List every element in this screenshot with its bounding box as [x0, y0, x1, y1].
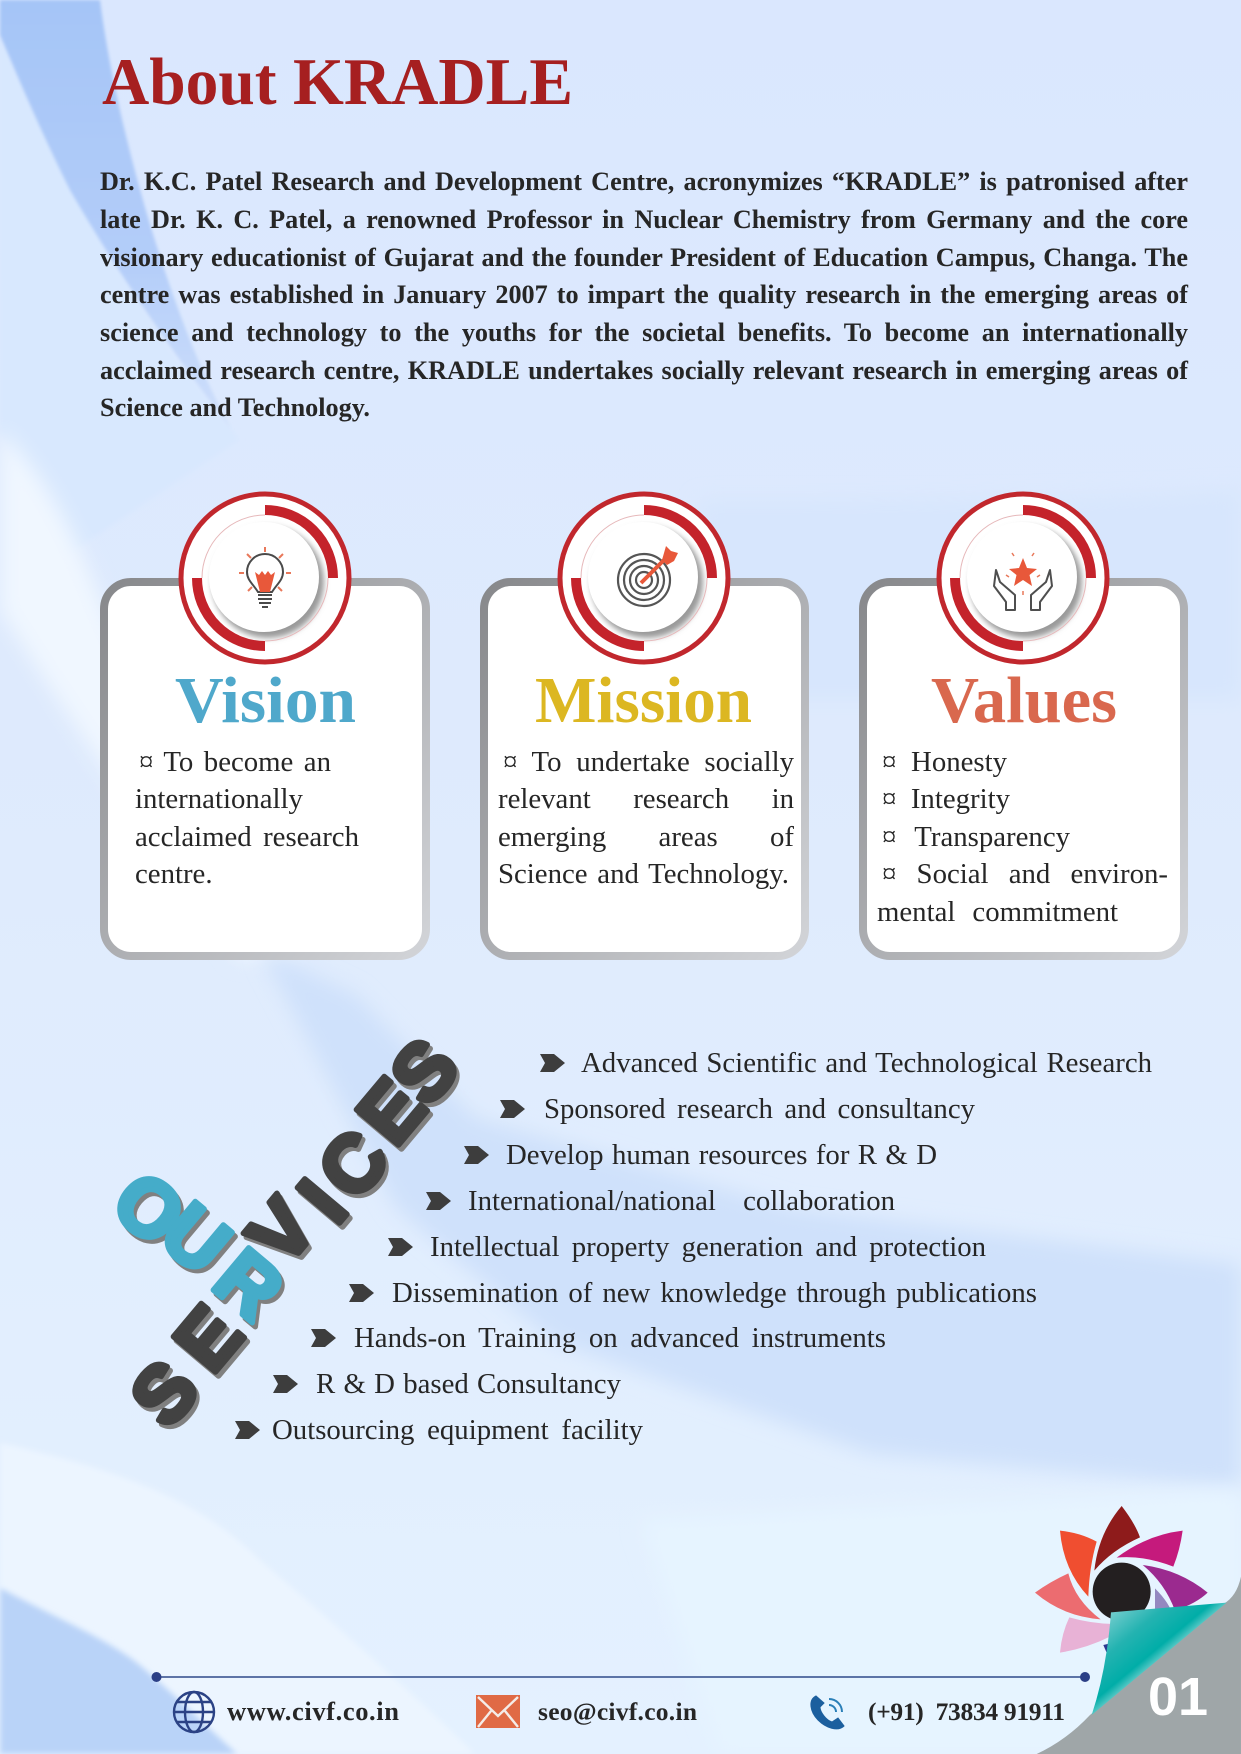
- panel: mission: [484, 582, 805, 956]
- heading word: our: [97, 1154, 300, 1337]
- text: Sponsored research and consultancy: [544, 1093, 975, 1125]
- heading word: services: C: [300, 1113, 406, 1215]
- icon: vision badge: [181, 494, 349, 662]
- text: ¤ To undertake socially: [503, 746, 794, 778]
- text: Outsourcing equipment facility: [272, 1414, 643, 1446]
- text: ¤ Transparency: [882, 821, 1070, 853]
- values text: [877, 746, 1168, 928]
- footer rule: [152, 1672, 1090, 1682]
- mission text: [498, 746, 794, 890]
- icon: values badge: [939, 494, 1107, 662]
- heading: mission: Mission: [535, 664, 752, 737]
- footer phone: (+91) 73834 91911: [868, 1697, 1065, 1726]
- heading word: services: E: [157, 1289, 259, 1387]
- text: centre.: [135, 858, 213, 890]
- icon: mission badge: [560, 494, 728, 662]
- text: acclaimed research: [135, 821, 359, 853]
- text: Dr. K.C. Patel Research and Development Centre, acronymizes “KRADLE” is patronised after: [100, 167, 1188, 196]
- heading: vision: Vision: [175, 664, 356, 737]
- text: ¤ Integrity: [882, 783, 1010, 815]
- heading: values: Values: [931, 664, 1117, 737]
- footer email: seo@civf.co.in: [538, 1697, 697, 1726]
- text: ¤ Social and environ-: [882, 858, 1168, 890]
- heading word: services: E: [340, 1062, 442, 1160]
- vision text: [135, 746, 359, 890]
- text: Dissemination of new knowledge through publications: [392, 1277, 1037, 1309]
- text: Hands-on Training on advanced instruments: [354, 1322, 886, 1354]
- heading word: services: S: [113, 1344, 215, 1442]
- text: Intellectual property generation and protection: [430, 1231, 986, 1263]
- intro paragraph: [100, 167, 1188, 422]
- text: relevant research in: [498, 783, 794, 815]
- text: ¤ To become an: [139, 746, 331, 778]
- panel: vision: [104, 582, 426, 956]
- icon: phone: [811, 1696, 844, 1729]
- text: Develop human resources for R & D: [506, 1139, 937, 1171]
- text: Science and Technology.: [498, 858, 789, 890]
- text: ¤ Honesty: [882, 746, 1007, 778]
- icon: globe: [174, 1692, 214, 1732]
- services list: [272, 1047, 1152, 1446]
- panel: values: [863, 582, 1184, 956]
- text: R & D based Consultancy: [316, 1368, 621, 1400]
- text: acclaimed research centre, KRADLE undertakes socially relevant research in emerging areas of: [100, 356, 1188, 385]
- text: mental commitment: [877, 896, 1118, 928]
- text: International/national collaboration: [468, 1185, 895, 1217]
- heading word: services: V: [230, 1182, 332, 1280]
- text: Advanced Scientific and Technological Research: [581, 1047, 1152, 1079]
- page number: 01: [1148, 1667, 1208, 1727]
- icon: service arrows: [235, 1054, 565, 1439]
- text: late Dr. K. C. Patel, a renowned Professor in Nuclear Chemistry from Germany and the core: [100, 205, 1188, 234]
- text: science and technology to the youths for the societal benefits. To become an internationally: [100, 318, 1188, 347]
- heading word: services: I: [281, 1164, 363, 1238]
- title: About KRADLE: [102, 45, 573, 119]
- text: centre was established in January 2007 to impart the quality research in the emerging areas of: [100, 280, 1188, 309]
- footer website: www.civf.co.in: [227, 1696, 399, 1726]
- text: visionary educationist of Gujarat and the founder President of Education Campus, Changa. The: [100, 243, 1188, 272]
- heading word: services: [113, 1022, 475, 1442]
- heading word: our: R: [198, 1231, 300, 1337]
- heading: our services: [97, 1022, 475, 1442]
- heading word: our: U: [145, 1185, 247, 1291]
- heading word: our: O: [97, 1154, 201, 1262]
- text: Science and Technology.: [100, 393, 370, 422]
- heading word: services: S: [373, 1022, 475, 1120]
- page curl: [1037, 1577, 1241, 1754]
- logo: flower: [1035, 1506, 1208, 1657]
- icon: mail: [476, 1695, 520, 1728]
- text: emerging areas of: [498, 821, 794, 853]
- text: internationally: [135, 783, 303, 815]
